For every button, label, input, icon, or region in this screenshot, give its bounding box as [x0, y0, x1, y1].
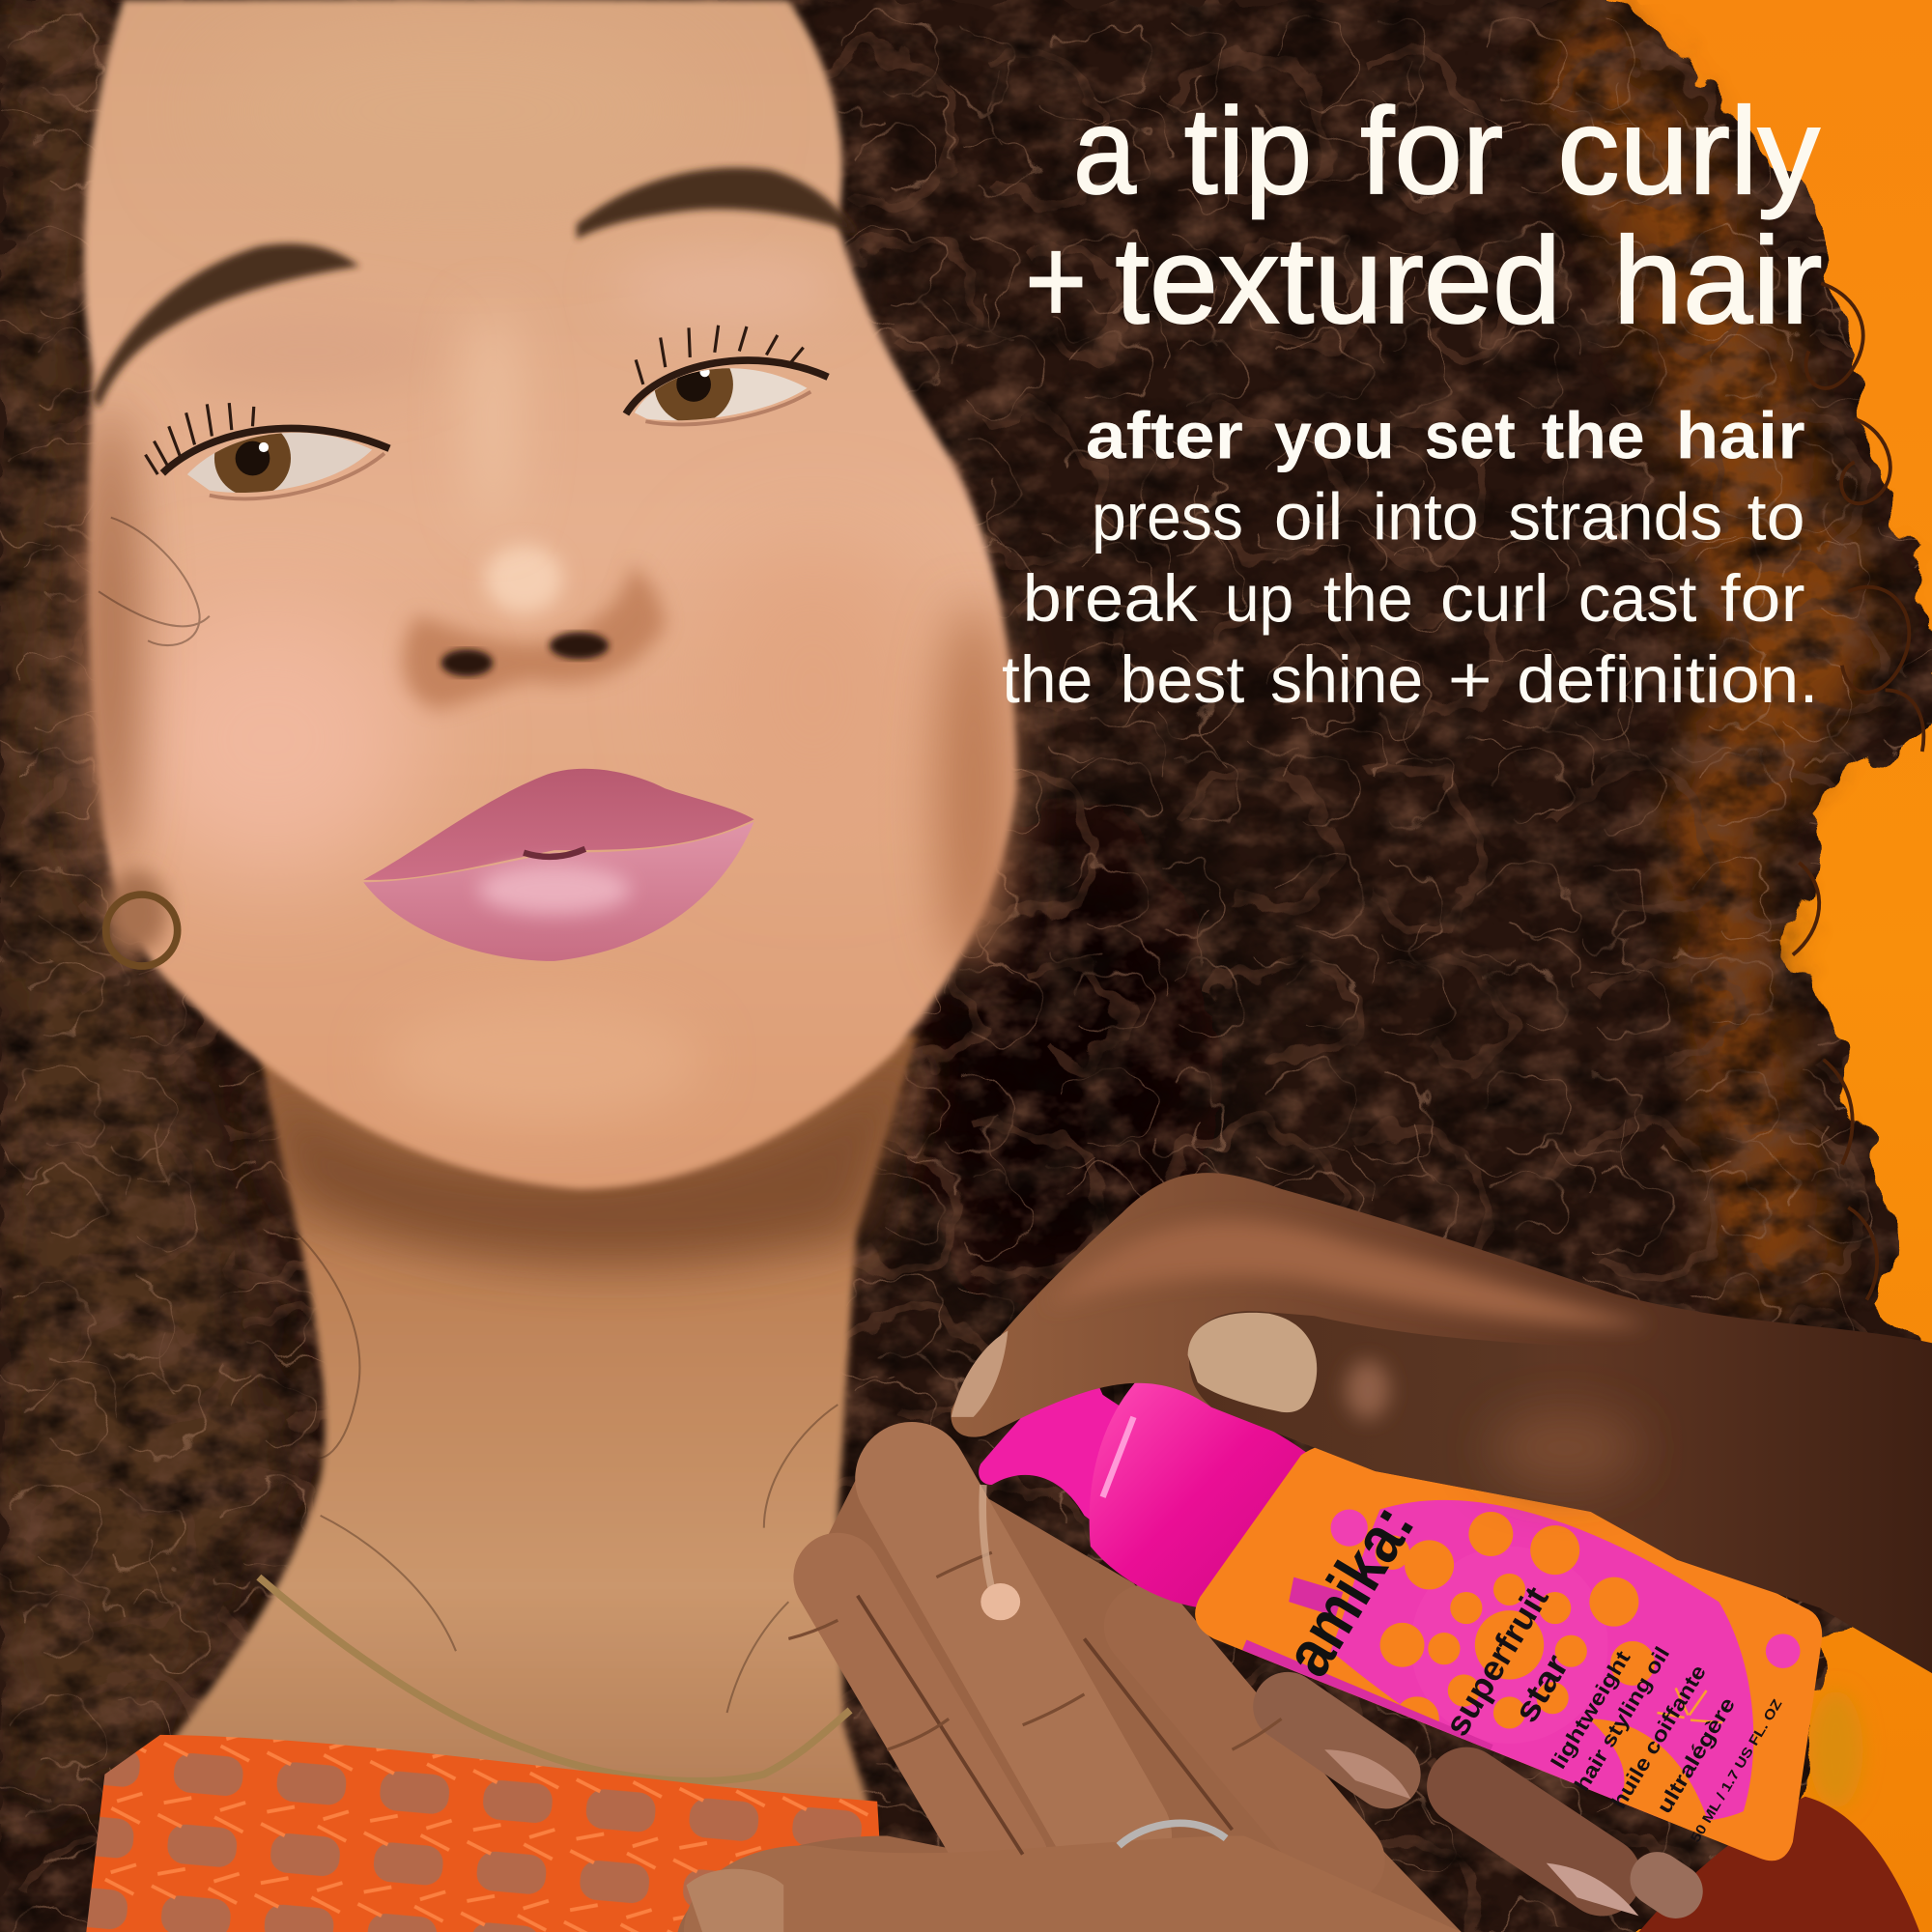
title line 2: textured: [1115, 213, 1561, 350]
lips: [363, 769, 754, 961]
nose: [403, 308, 666, 710]
shadow under jaw: [265, 1047, 918, 1265]
finger under bottle: [1288, 1707, 1386, 1775]
sunlit hair fringe: [1540, 0, 1874, 1306]
tip subheading: hair: [1676, 398, 1805, 472]
finger 2: [912, 1479, 1115, 1836]
tip line 2: break: [1023, 561, 1198, 636]
eyebrow: right: [577, 168, 856, 239]
thumb base across bottom: [684, 1836, 1462, 1932]
nail middle: [1324, 1749, 1410, 1799]
product name: [1437, 1580, 1785, 1845]
finger 3: [1146, 1627, 1343, 1861]
neck: [160, 1035, 918, 1824]
tip line 2: [1023, 561, 1805, 636]
eyebrow: left: [93, 243, 359, 409]
thumb: [1189, 1311, 1614, 1521]
product name: 50 ML / 1.7 US FL. OZ: [1688, 1696, 1785, 1845]
tip line 3: the: [1002, 642, 1093, 717]
tip line 2: curl: [1440, 561, 1548, 636]
title line 2: [1025, 213, 1822, 350]
finger lower right: [1466, 1786, 1602, 1877]
tip line 3: best: [1120, 642, 1244, 717]
thumb knuckle highlight: [1346, 1360, 1390, 1419]
ear with hoop earring: [103, 870, 178, 966]
tip line 2: the: [1323, 561, 1413, 636]
brand name: amika:: [1269, 1492, 1429, 1689]
label artwork: [1244, 1500, 1801, 1836]
cap highlight: [1103, 1417, 1133, 1497]
tip line 1: into: [1373, 480, 1479, 554]
tip text block: [1002, 398, 1819, 717]
title line 1: for: [1360, 83, 1503, 220]
index finger highlight: [1047, 1221, 1651, 1325]
tip subheading: after: [1086, 398, 1243, 472]
hand: open palm with fingers: [678, 1466, 1676, 1932]
bottle body: [1195, 1441, 1822, 1861]
title line 2: +: [1025, 213, 1087, 350]
tip line 1: oil: [1274, 480, 1343, 554]
tip line 1: [1092, 480, 1805, 554]
pump nozzle: [979, 1368, 1164, 1534]
finger creases: [788, 1552, 1282, 1749]
thumb nail on palm: [686, 1869, 783, 1932]
tip line 3: +: [1448, 642, 1492, 717]
dark hair behind neck: [899, 801, 1220, 1319]
dark red sweater at lower right: [1638, 1797, 1919, 1932]
title: [1025, 83, 1822, 350]
flyaway curls at right edge: [1793, 283, 1923, 1300]
crochet sweater: [86, 1735, 885, 1932]
eye: right: [626, 326, 828, 424]
tip subheading: set: [1424, 398, 1516, 472]
tip line 2: for: [1720, 561, 1805, 636]
back of thumb sheen: [1491, 1413, 1638, 1482]
tip line 3: [1002, 642, 1819, 717]
flyaway hair over cheek and neck: [99, 518, 838, 1713]
title line 1: [1073, 83, 1820, 220]
tip subheading: the: [1542, 398, 1645, 472]
tip line 3: shine: [1270, 642, 1423, 717]
index fingernail: [952, 1331, 1008, 1417]
tip line 1: to: [1747, 480, 1805, 554]
ring: [1119, 1823, 1226, 1846]
tip subheading: [1086, 398, 1805, 472]
golden hair wisps lower right: [1808, 1690, 1863, 1808]
tip line 1: strands: [1508, 480, 1722, 554]
palm base: [678, 1466, 1462, 1932]
product name: hair styling oil: [1569, 1642, 1674, 1795]
tip subheading: you: [1274, 398, 1395, 472]
product name: ultralégère: [1652, 1693, 1740, 1817]
cap collar: [1090, 1378, 1309, 1608]
thumbnail: [1188, 1313, 1317, 1412]
product bottle: [979, 1368, 1822, 1861]
left hair highlights: [0, 0, 296, 1824]
title line 1: tip: [1184, 83, 1312, 220]
oil drop: [980, 1485, 1020, 1620]
nail lower right: [1547, 1863, 1638, 1916]
necklace: [259, 1577, 850, 1781]
face: [84, 0, 1016, 1189]
product name: superfruit: [1437, 1580, 1556, 1743]
hand: holding the bottle: [951, 1173, 1932, 1673]
tip line 2: up: [1225, 561, 1293, 636]
finger separations: [858, 1596, 1233, 1855]
title line 2: hair: [1613, 213, 1822, 350]
tip line 3: definition.: [1517, 642, 1819, 717]
little finger: [1658, 1879, 1676, 1891]
tip line 1: press: [1092, 480, 1243, 554]
title line 1: a: [1073, 83, 1136, 220]
finger 1: [838, 1577, 1005, 1861]
product name: huile coiffante: [1606, 1661, 1711, 1812]
facial shading: [84, 25, 1010, 1122]
product name: star: [1506, 1648, 1577, 1729]
title line 1: curly: [1557, 83, 1820, 220]
tip line 2: cast: [1578, 561, 1696, 636]
eye: left: [146, 403, 389, 498]
product name: lightweight: [1546, 1647, 1635, 1773]
